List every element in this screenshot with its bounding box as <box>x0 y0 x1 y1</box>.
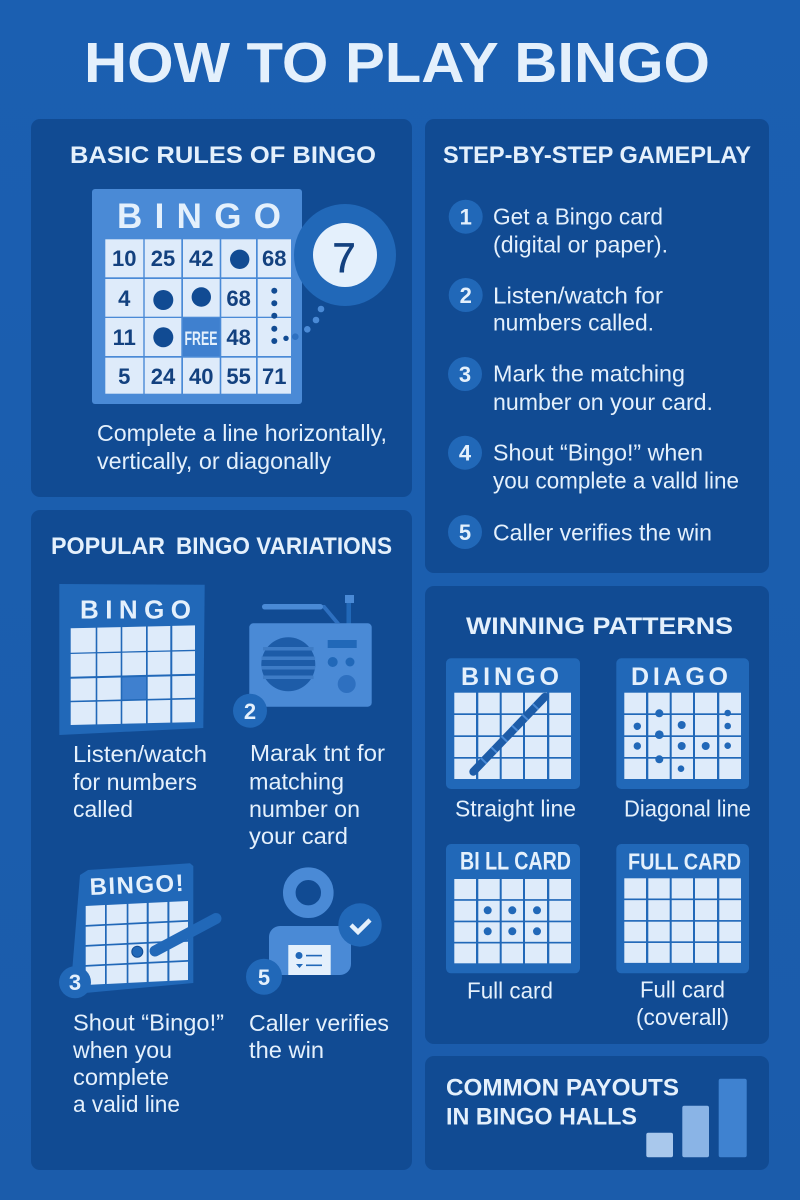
bingo card with numbers: 25 <box>151 246 175 271</box>
called number ball: 7: 7 <box>332 234 356 281</box>
pattern card: straight line: BINGO <box>461 663 559 691</box>
panel: step-by-step gameplay <box>425 119 769 573</box>
step 1 <box>449 200 668 257</box>
caption: listen/watch: Listen/watch <box>73 741 207 767</box>
caption: matching number: number on <box>249 796 360 822</box>
title: HOW TO PLAY BINGO <box>84 31 710 95</box>
bingo card with numbers: 48 <box>226 325 251 350</box>
step 2 <box>449 278 663 336</box>
caption: complete a line <box>97 420 387 474</box>
bingo card with numbers: 24 <box>151 364 176 389</box>
heading: common payouts: IN BINGO HALLS <box>446 1103 637 1130</box>
bingo card with numbers <box>92 189 302 404</box>
caption: complete a line: Complete a line horizontally, <box>97 420 387 446</box>
bingo card with numbers: FREE <box>184 329 218 350</box>
pattern card: bill card <box>446 844 580 973</box>
caption: shout bingo: a valid line <box>73 1091 180 1117</box>
caption: caller verifies: Caller verifies <box>249 1010 389 1036</box>
step 5 <box>448 515 712 549</box>
step 4: 4 <box>459 441 472 466</box>
pattern card: straight line <box>446 658 580 789</box>
called number ball: 7 <box>292 204 396 340</box>
illustration: bingo card with marker <box>59 863 216 998</box>
pattern card: full card: FULL CARD <box>628 849 741 875</box>
heading: popular variations: POPULAR <box>51 533 165 560</box>
caption: matching number: your card <box>249 823 348 849</box>
caption: matching number: matching <box>249 768 344 794</box>
caption: listen/watch: called <box>73 796 133 822</box>
bingo card with numbers: 4 <box>118 286 131 311</box>
illustration: bingo card <box>59 584 205 735</box>
caption: matching number <box>249 740 385 849</box>
step 2: 2 <box>460 283 472 308</box>
caption: shout bingo: when you <box>72 1037 172 1063</box>
pattern card: full card <box>616 844 749 973</box>
step 3: number on your card. <box>493 389 713 415</box>
icon: caller with check: 5 <box>258 965 270 990</box>
bingo card with numbers: 68 <box>226 286 251 311</box>
caption: caller verifies: the win <box>249 1037 324 1063</box>
bingo card with numbers: 5 <box>118 364 130 389</box>
panel: winning patterns <box>425 586 769 1044</box>
pattern card: bill card: BI LL CARD <box>460 848 571 876</box>
step 1: 1 <box>460 204 472 230</box>
pattern card: diagonal <box>616 658 749 789</box>
bingo card with numbers: 55 <box>226 364 251 389</box>
illustration: bingo card with marker: 3 <box>69 970 81 995</box>
label: full card: Full card <box>467 977 553 1003</box>
caption: caller verifies <box>249 1010 389 1063</box>
caption: shout bingo <box>72 1010 224 1117</box>
step 2: numbers called. <box>493 310 654 336</box>
bingo card with numbers: 42 <box>189 246 214 271</box>
bar chart icon <box>646 1079 747 1157</box>
step 4 <box>448 436 739 493</box>
caption: listen/watch <box>73 741 207 822</box>
illustration: bingo card: BINGO <box>80 595 191 625</box>
bingo card with numbers: 11 <box>113 325 136 350</box>
illustration: bingo card with marker: BINGO! <box>89 870 184 901</box>
label: straight line: Straight line <box>455 796 576 822</box>
icon: radio: 2 <box>244 699 256 724</box>
heading: basic rules: BASIC RULES OF BINGO <box>70 142 376 169</box>
heading: winning patterns: WINNING PATTERNS <box>466 613 733 640</box>
caption: matching number: Marak tnt for <box>250 740 385 766</box>
step 1: Get a Bingo card <box>493 203 663 229</box>
heading: popular variations <box>51 533 392 560</box>
heading: step-by-step: STEP-BY-STEP GAMEPLAY <box>443 142 751 169</box>
bingo card with numbers: 68 <box>262 246 287 271</box>
label: diagonal line: Diagonal line <box>624 796 751 822</box>
label: full card coverall: (coverall) <box>636 1004 729 1030</box>
icon: radio <box>233 595 372 728</box>
step 2: Listen/watch for <box>493 282 663 308</box>
step 3: 3 <box>459 362 471 387</box>
panel: common payouts <box>425 1056 769 1170</box>
step 4: Shout “Bingo!” when <box>493 440 703 466</box>
step 5: Caller verifies the win <box>493 520 712 546</box>
caption: shout bingo: Shout “Bingo!” <box>73 1010 224 1036</box>
heading: common payouts: COMMON PAYOUTS <box>446 1075 679 1102</box>
step 3 <box>448 357 713 415</box>
bingo card with numbers: 71 <box>262 364 287 389</box>
caption: complete a line: vertically, or diagonally <box>97 448 331 474</box>
bingo card with numbers: 10 <box>112 246 137 271</box>
pattern card: diagonal: DIAGO <box>631 663 728 691</box>
caption: shout bingo: complete <box>73 1064 169 1090</box>
bingo card with numbers: BINGO <box>117 197 281 236</box>
step 4: you complete a valld line <box>493 467 739 493</box>
step 1: (digital or paper). <box>493 231 668 257</box>
label: full card coverall <box>636 977 729 1030</box>
panel: basic rules of bingo <box>31 119 412 497</box>
caption: listen/watch: for numbers <box>73 769 197 795</box>
heading: popular variations: BINGO VARIATIONS <box>176 533 392 560</box>
heading: common payouts <box>446 1075 679 1130</box>
step 5: 5 <box>459 520 471 545</box>
step 3: Mark the matching <box>493 361 685 387</box>
icon: caller with check <box>246 874 382 995</box>
bingo card with numbers: 40 <box>189 364 214 389</box>
panel: popular bingo variations <box>31 510 412 1170</box>
label: full card coverall: Full card <box>640 977 725 1003</box>
